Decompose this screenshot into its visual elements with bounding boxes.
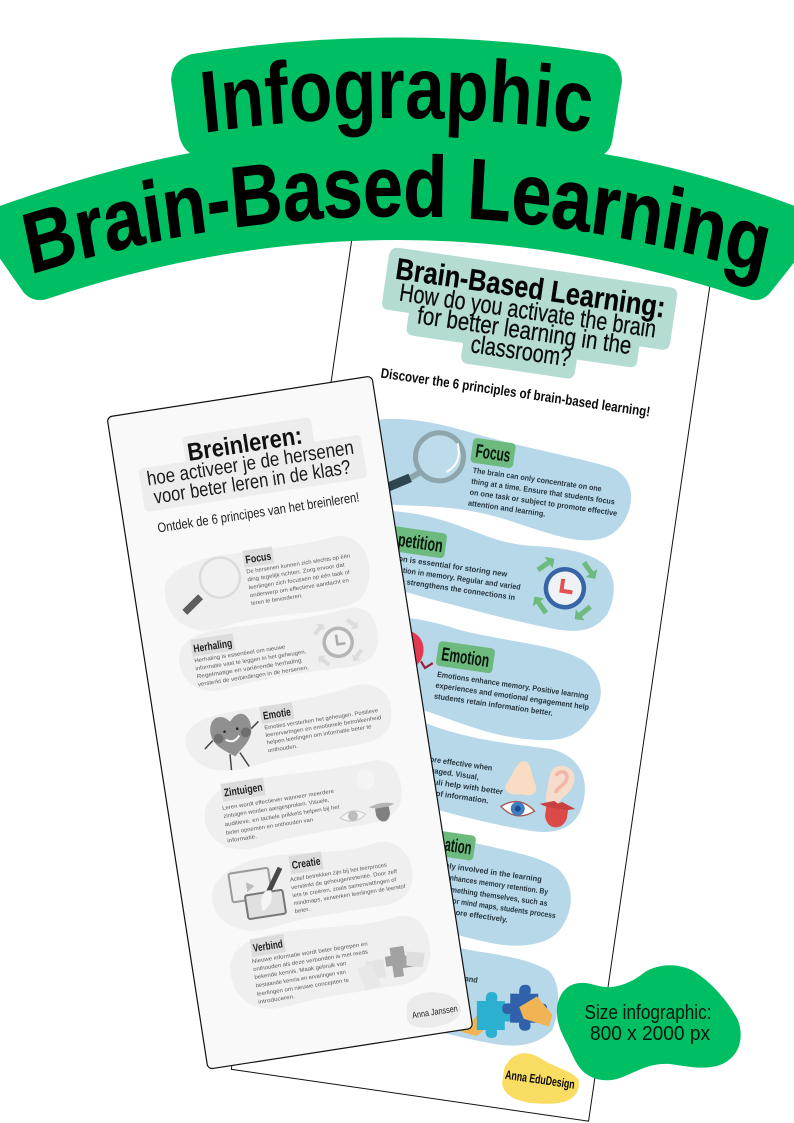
text: focus: thing at a time. Ensure that students focus (471, 477, 616, 507)
yellow signature blob: Anna EduDesign (504, 1068, 576, 1092)
panel: creatie (207, 835, 418, 937)
text: senses: Learning is more effective when (383, 748, 493, 773)
text: focus: leerlingen zich focussen op één taak of (248, 570, 351, 591)
icon: red heart (364, 626, 437, 689)
label: verbind (250, 934, 286, 957)
label: creation (419, 828, 476, 861)
text: focus: attention and learning. (467, 498, 546, 519)
signature blob (403, 988, 463, 1031)
text: focus: ding tegelijk richten. Zorg ervoor dat (247, 562, 345, 583)
title line 2: Brain-Based Learning (22, 154, 769, 287)
text: focus (467, 466, 622, 529)
panel: focus (160, 532, 375, 636)
text: herhaling: Regelmatige en variërende herhaling (196, 658, 302, 680)
text: zintuigen: zintuigen worden aangesproken. Visuele, (223, 797, 330, 820)
title box (375, 247, 678, 392)
text: zintuigen: Leren wordt effectiever wanneer meerdere (222, 789, 334, 812)
size callout blob: Size infographic: (584, 1002, 712, 1024)
label: focus: Focus (245, 551, 272, 566)
label: focus (470, 438, 516, 468)
title box: How do you activate the brain (398, 279, 658, 343)
text: herhaling: versterkt de verbindingen in de hersenen. (198, 665, 310, 688)
label: repetition (374, 524, 447, 559)
text: emotion (433, 670, 591, 723)
text: senses: multiple senses are engaged. Visual, (352, 754, 479, 782)
text: creatie (290, 860, 408, 915)
text: focus: on one task or subject to promote effective (469, 488, 618, 518)
icon: grey tongue (368, 801, 397, 823)
title box: voor beter leren in de klas? (152, 456, 352, 509)
label: creatie: Creatie (291, 856, 321, 872)
panel: repetition (340, 505, 621, 637)
text: verbind: Nieuwe informatie wordt beter begrepen en (252, 941, 368, 965)
text: creation: summaries or mind maps, students process (415, 891, 557, 920)
label: emotie: Emotie (262, 706, 292, 723)
panel: herhaling (175, 604, 382, 696)
label: verbind: Verbind (252, 938, 284, 955)
title line 1 (202, 58, 591, 138)
text: verbind: bestaande kennis en ervaringen van (255, 970, 346, 989)
text: herhaling (194, 641, 310, 688)
text: creatie: Actief betrekken zijn bij het leerproces (290, 862, 388, 883)
label: emotie (259, 702, 294, 724)
title box: hoe activeer je de hersenen (145, 437, 355, 490)
intro line: Ontdek de 6 principes van het breinleren! (156, 489, 360, 535)
text: creation: process enhances memory retention. By (418, 869, 549, 896)
text: emotie: Emoties versterken het geheugen. Positieve (264, 708, 379, 732)
title banner: green arched ribbons (0, 38, 794, 300)
label: creation: Creation (424, 832, 473, 859)
text: zintuigen: beter opnemen en onthouden van (226, 817, 314, 837)
text: verbind: onthouden als deze verbonden is met reeds (253, 949, 369, 973)
front Dutch infographic card (107, 376, 473, 1069)
text: senses (339, 742, 507, 807)
text: creatie: iets te creëren, zoals samenvattingen of (292, 877, 397, 899)
panel: verbind (226, 910, 436, 1015)
icon: grey puzzle (355, 943, 429, 991)
text: creatie: versterkt de geheugenretentie. Door zelf (291, 869, 398, 891)
text: senses: auditory, and tactile stimuli help with better (341, 764, 504, 796)
text: creation: information more effectively. (405, 901, 508, 924)
icon: tongue (537, 799, 576, 830)
text: verbind: bekende kennis. Maak gebruik van (254, 961, 347, 981)
title box: Breinleren: (185, 422, 304, 467)
text: verbind: introduceren. (258, 994, 296, 1006)
text: focus (246, 553, 356, 607)
text: senses: absorption and retention of information. (344, 776, 489, 805)
text: zintuigen (222, 788, 343, 845)
text: verbind: leerlingen om nieuwe concepten te (257, 978, 350, 998)
signature blob: Anna Janssen (411, 1003, 458, 1020)
label: creatie (288, 851, 324, 874)
text: zintuigen: informatie. (227, 834, 258, 845)
panel: emotion (324, 608, 608, 749)
text: emotion: experiences and emotional engagement help (435, 681, 590, 712)
text: emotion: Emotions enhance memory. Positive learning (437, 670, 589, 701)
text: creation: Being actively involved in the learning (405, 855, 543, 884)
label: emotion: Emotion (440, 644, 491, 672)
title box: classroom? (469, 330, 573, 373)
panel: senses (311, 699, 593, 838)
text: emotie: helpen leerlingen om informatie beter te (266, 724, 372, 746)
text: repetition: Repetition is essential for storing new (370, 550, 509, 579)
icon: puzzle and hands (461, 974, 557, 1048)
text: creatie: beter. (294, 907, 311, 915)
panel: connect (280, 918, 565, 1052)
label: focus (242, 546, 274, 568)
text: herhaling: Herhaling is essentieel om nieuwe (194, 644, 286, 664)
icon: clock with arrows (526, 551, 603, 627)
text: verbind (252, 941, 374, 1006)
text: emotie: leerervaringen en emotionele betrokkenheid (265, 715, 382, 739)
label: herhaling: Herhaling (193, 638, 233, 655)
icon: grey clock (309, 614, 367, 670)
icon: screen, tablet and brush (228, 866, 287, 921)
text: zintuigen: auditieve, en tactiele prikkels helpen bij het (224, 804, 340, 828)
title box (134, 410, 367, 512)
text: focus: leren te bevorderen. (251, 593, 304, 607)
title box: for better learning in the (416, 301, 633, 360)
panel: emotie (181, 680, 397, 777)
panel: creation (294, 802, 580, 954)
text: focus: The brain can only concentrate on one (472, 466, 603, 493)
label: repetition: Repetition (381, 528, 444, 557)
icon: magnifier (177, 555, 244, 612)
icon: ear (545, 764, 576, 808)
icon: grey eye (339, 809, 367, 823)
icon: eye (500, 799, 536, 818)
text: focus: De hersenen kunnen zich slechts op één (246, 553, 351, 575)
title box: Brain-Based Learning: (394, 253, 668, 325)
icon: faint nose and ear (355, 768, 376, 791)
label: herhaling (190, 633, 235, 657)
icon: magnifier (378, 425, 467, 503)
title line 1: Infographic (202, 58, 591, 138)
panel: zintuigen (200, 757, 407, 855)
text: creation: creating something themselves, such as (413, 880, 549, 908)
text: emotie: onthouden. (268, 744, 299, 754)
text: creatie: mindmaps, verwerken leerlingen de leerstof (293, 884, 406, 907)
intro line: Discover the 6 principles of brain-based learning! (380, 365, 651, 420)
text: emotion: students retain information better. (433, 692, 553, 718)
text: repetition: repetition strengthens the connections in (371, 572, 516, 602)
text: repetition (367, 550, 523, 603)
text: emotie (264, 708, 384, 754)
panel: focus (353, 413, 638, 547)
text: repetition: information in memory. Regular and varied (376, 562, 521, 592)
text: creation (398, 855, 562, 931)
yellow signature blob (500, 1050, 582, 1109)
back infographic paper (231, 179, 718, 1121)
label: zintuigen: Zintuigen (223, 782, 264, 799)
text: focus: onderwerp om effectieve aandacht en (250, 578, 349, 599)
label: emotion (435, 641, 495, 674)
icon: heart character (200, 711, 265, 774)
text: herhaling: informatie vast te leggen in het geheugen. (195, 649, 307, 672)
size callout blob (557, 965, 741, 1080)
text: connect: New information is better understood and (334, 955, 479, 985)
size callout blob: 800 x 2000 px (590, 1023, 710, 1045)
icon: nose (504, 759, 540, 797)
label: zintuigen (220, 777, 266, 802)
label: focus: Focus (474, 441, 512, 467)
